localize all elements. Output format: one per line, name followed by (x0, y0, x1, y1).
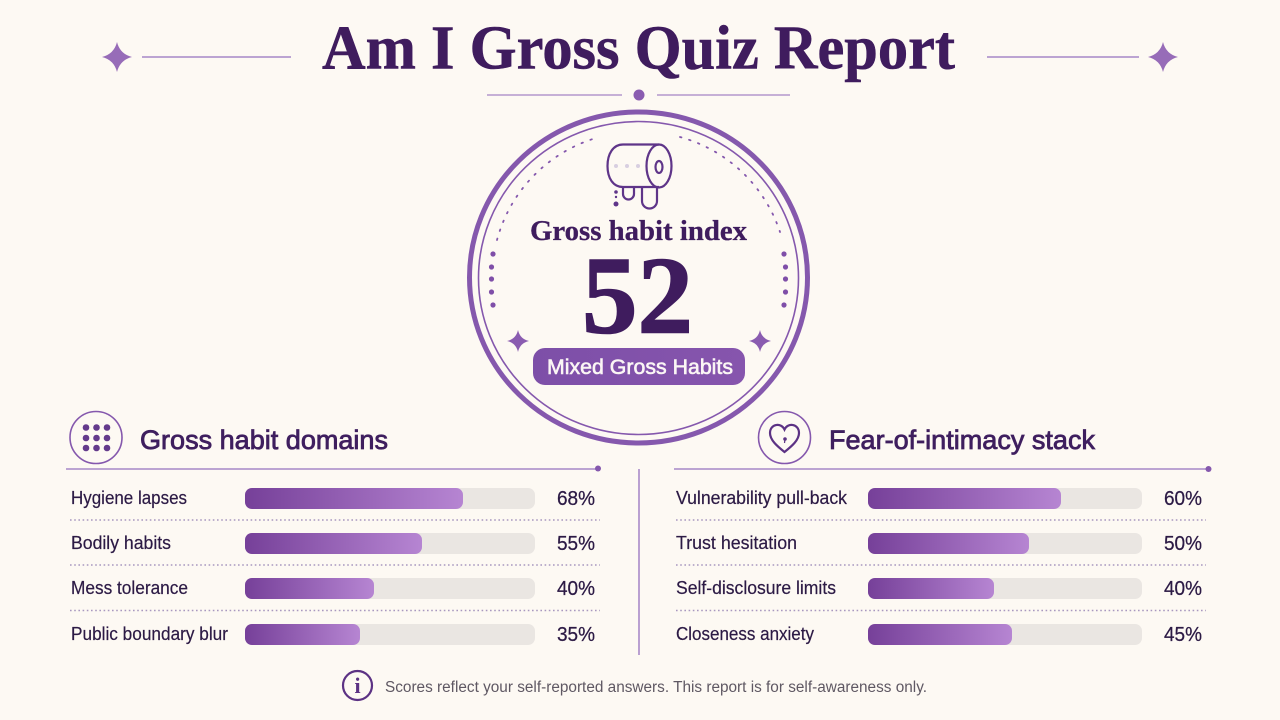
heading rule (674, 466, 1212, 472)
panel: gross habit domains (66, 412, 601, 646)
row: vulnerability pull-back (676, 488, 1202, 510)
icon: info (343, 671, 372, 700)
disclaimer text: Scores reflect your self-reported answers. This report is for self-awareness only. (385, 679, 927, 696)
row: bodily habits: Bodily habits (71, 533, 171, 553)
side dots (489, 251, 788, 308)
row: mess tolerance (71, 578, 595, 600)
row: trust hesitation: 50% (1164, 533, 1202, 555)
row: hygiene lapses: Hygiene lapses (71, 488, 187, 508)
row: vulnerability pull-back: Vulnerability pull-back (676, 488, 848, 508)
icon: left badge sparkle (507, 330, 529, 352)
heading: Gross habit domains (140, 425, 388, 455)
result pill (533, 348, 745, 385)
icon: info: i (354, 673, 361, 698)
row: bodily habits: 55% (557, 533, 595, 555)
score badge (470, 112, 808, 443)
right title rule (987, 56, 1139, 58)
row: hygiene lapses: 68% (557, 488, 595, 510)
icon: left sparkle (102, 42, 132, 72)
badge label: Gross habit index (530, 216, 747, 247)
icon: toilet roll (608, 144, 672, 209)
result pill: Mixed Gross Habits (547, 356, 733, 379)
dotted arc left (497, 138, 596, 240)
row: self-disclosure limits: 40% (1164, 578, 1202, 600)
icon: right badge sparkle (749, 330, 771, 352)
row: public boundary blur (71, 624, 595, 646)
row: hygiene lapses (71, 488, 595, 510)
panel divider (638, 469, 640, 655)
dotted arc right (680, 137, 780, 232)
icon: right sparkle (1148, 42, 1178, 72)
title: Am I Gross Quiz Report (322, 14, 955, 82)
row: vulnerability pull-back: 60% (1164, 488, 1202, 510)
icon: heart (758, 412, 810, 464)
row: mess tolerance: 40% (557, 578, 595, 600)
row: self-disclosure limits (676, 578, 1202, 600)
inner ring (478, 122, 798, 434)
row: closeness anxiety (676, 624, 1202, 646)
heading rule (66, 466, 601, 472)
row: bodily habits (71, 533, 595, 555)
row: trust hesitation (676, 533, 1202, 555)
row: public boundary blur: Public boundary blur (71, 624, 228, 644)
row: self-disclosure limits: Self-disclosure limits (676, 578, 836, 598)
heading: Fear-of-intimacy stack (829, 425, 1095, 455)
row: closeness anxiety: 45% (1164, 624, 1202, 646)
footer note (343, 671, 927, 700)
icon: dot grid (70, 412, 122, 464)
panel: fear-of-intimacy stack (674, 412, 1212, 646)
outer ring (470, 112, 808, 443)
left title rule (142, 56, 291, 58)
score number: 52 (582, 234, 693, 356)
row: trust hesitation: Trust hesitation (676, 533, 797, 553)
row: mess tolerance: Mess tolerance (71, 578, 188, 598)
row: public boundary blur: 35% (557, 624, 595, 646)
title underline ornament (487, 90, 790, 100)
row: closeness anxiety: Closeness anxiety (676, 624, 814, 644)
